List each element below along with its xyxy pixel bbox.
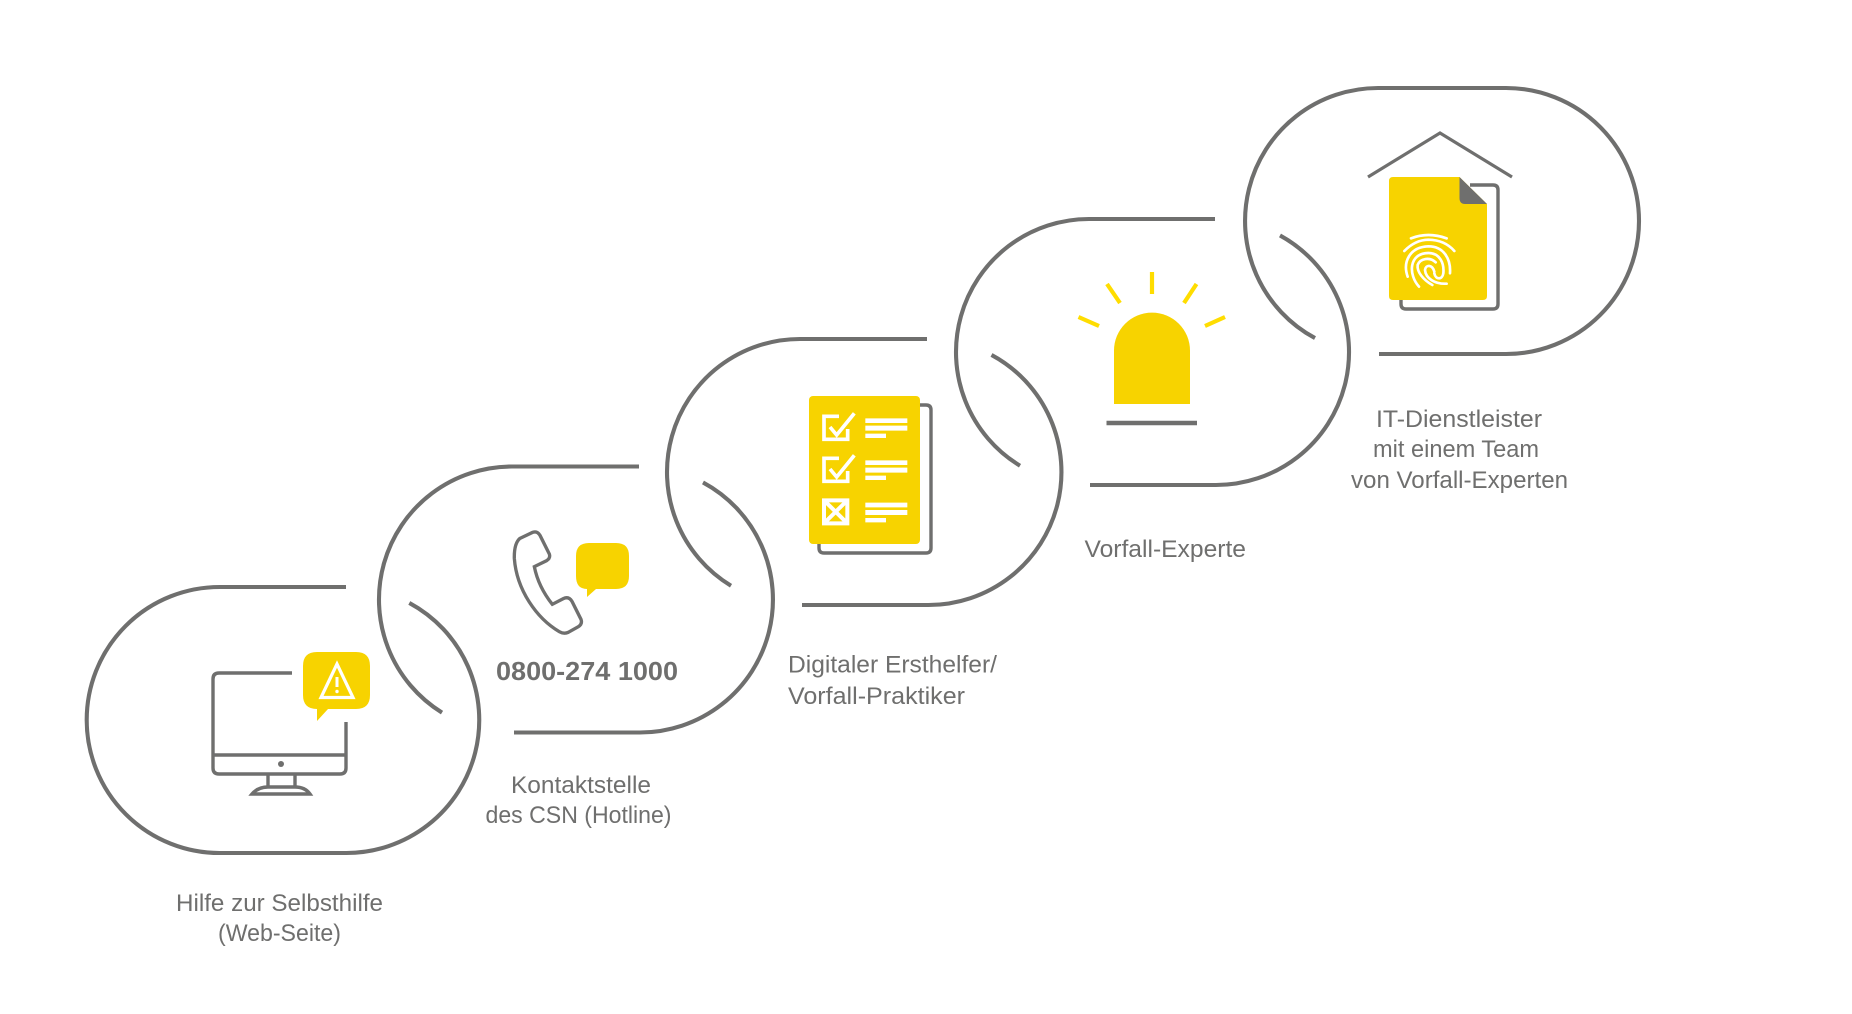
label: step 5: von Vorfall-Experten (1351, 467, 1568, 494)
icon: checklist (809, 396, 931, 553)
label: step 5: mit einem Team (1373, 436, 1539, 463)
panel: step 3 digital first responder (667, 339, 1061, 710)
label: step 1: (Web-Seite) (218, 920, 341, 947)
outline: step 3 loop (667, 339, 1061, 605)
label: step 4: Vorfall-Experte (1084, 536, 1246, 563)
icon: warning speech bubble (303, 652, 370, 721)
icon: fingerprint document (1389, 177, 1498, 309)
icon: house roof (1368, 133, 1512, 177)
label: step 2: des CSN (Hotline) (486, 802, 672, 829)
icon: telephone receiver (514, 532, 581, 633)
label: step 5: IT-Dienstleister (1376, 406, 1542, 433)
panel: step 5 IT service provider (1245, 88, 1639, 494)
label: step 2: Kontaktstelle (511, 772, 651, 799)
phone number: 0800-274 1000 (496, 656, 678, 686)
outline: step 4 loop (956, 219, 1349, 485)
icon: monitor (213, 673, 346, 794)
panel: step 1 self-help website (87, 587, 479, 947)
outline: step 1 loop (87, 587, 479, 853)
label: step 3: Vorfall-Praktiker (788, 683, 965, 710)
outline: step 5 loop (1245, 88, 1639, 354)
label: step 1: Hilfe zur Selbsthilfe (176, 890, 383, 917)
outline: step 2 loop (379, 466, 773, 732)
icon: alarm siren (1078, 272, 1225, 423)
label: step 3: Digitaler Ersthelfer/ (788, 652, 997, 678)
panel: step 4 incident expert (956, 219, 1349, 563)
icon: speech bubble (576, 543, 629, 597)
panel: step 2 hotline (379, 466, 773, 829)
